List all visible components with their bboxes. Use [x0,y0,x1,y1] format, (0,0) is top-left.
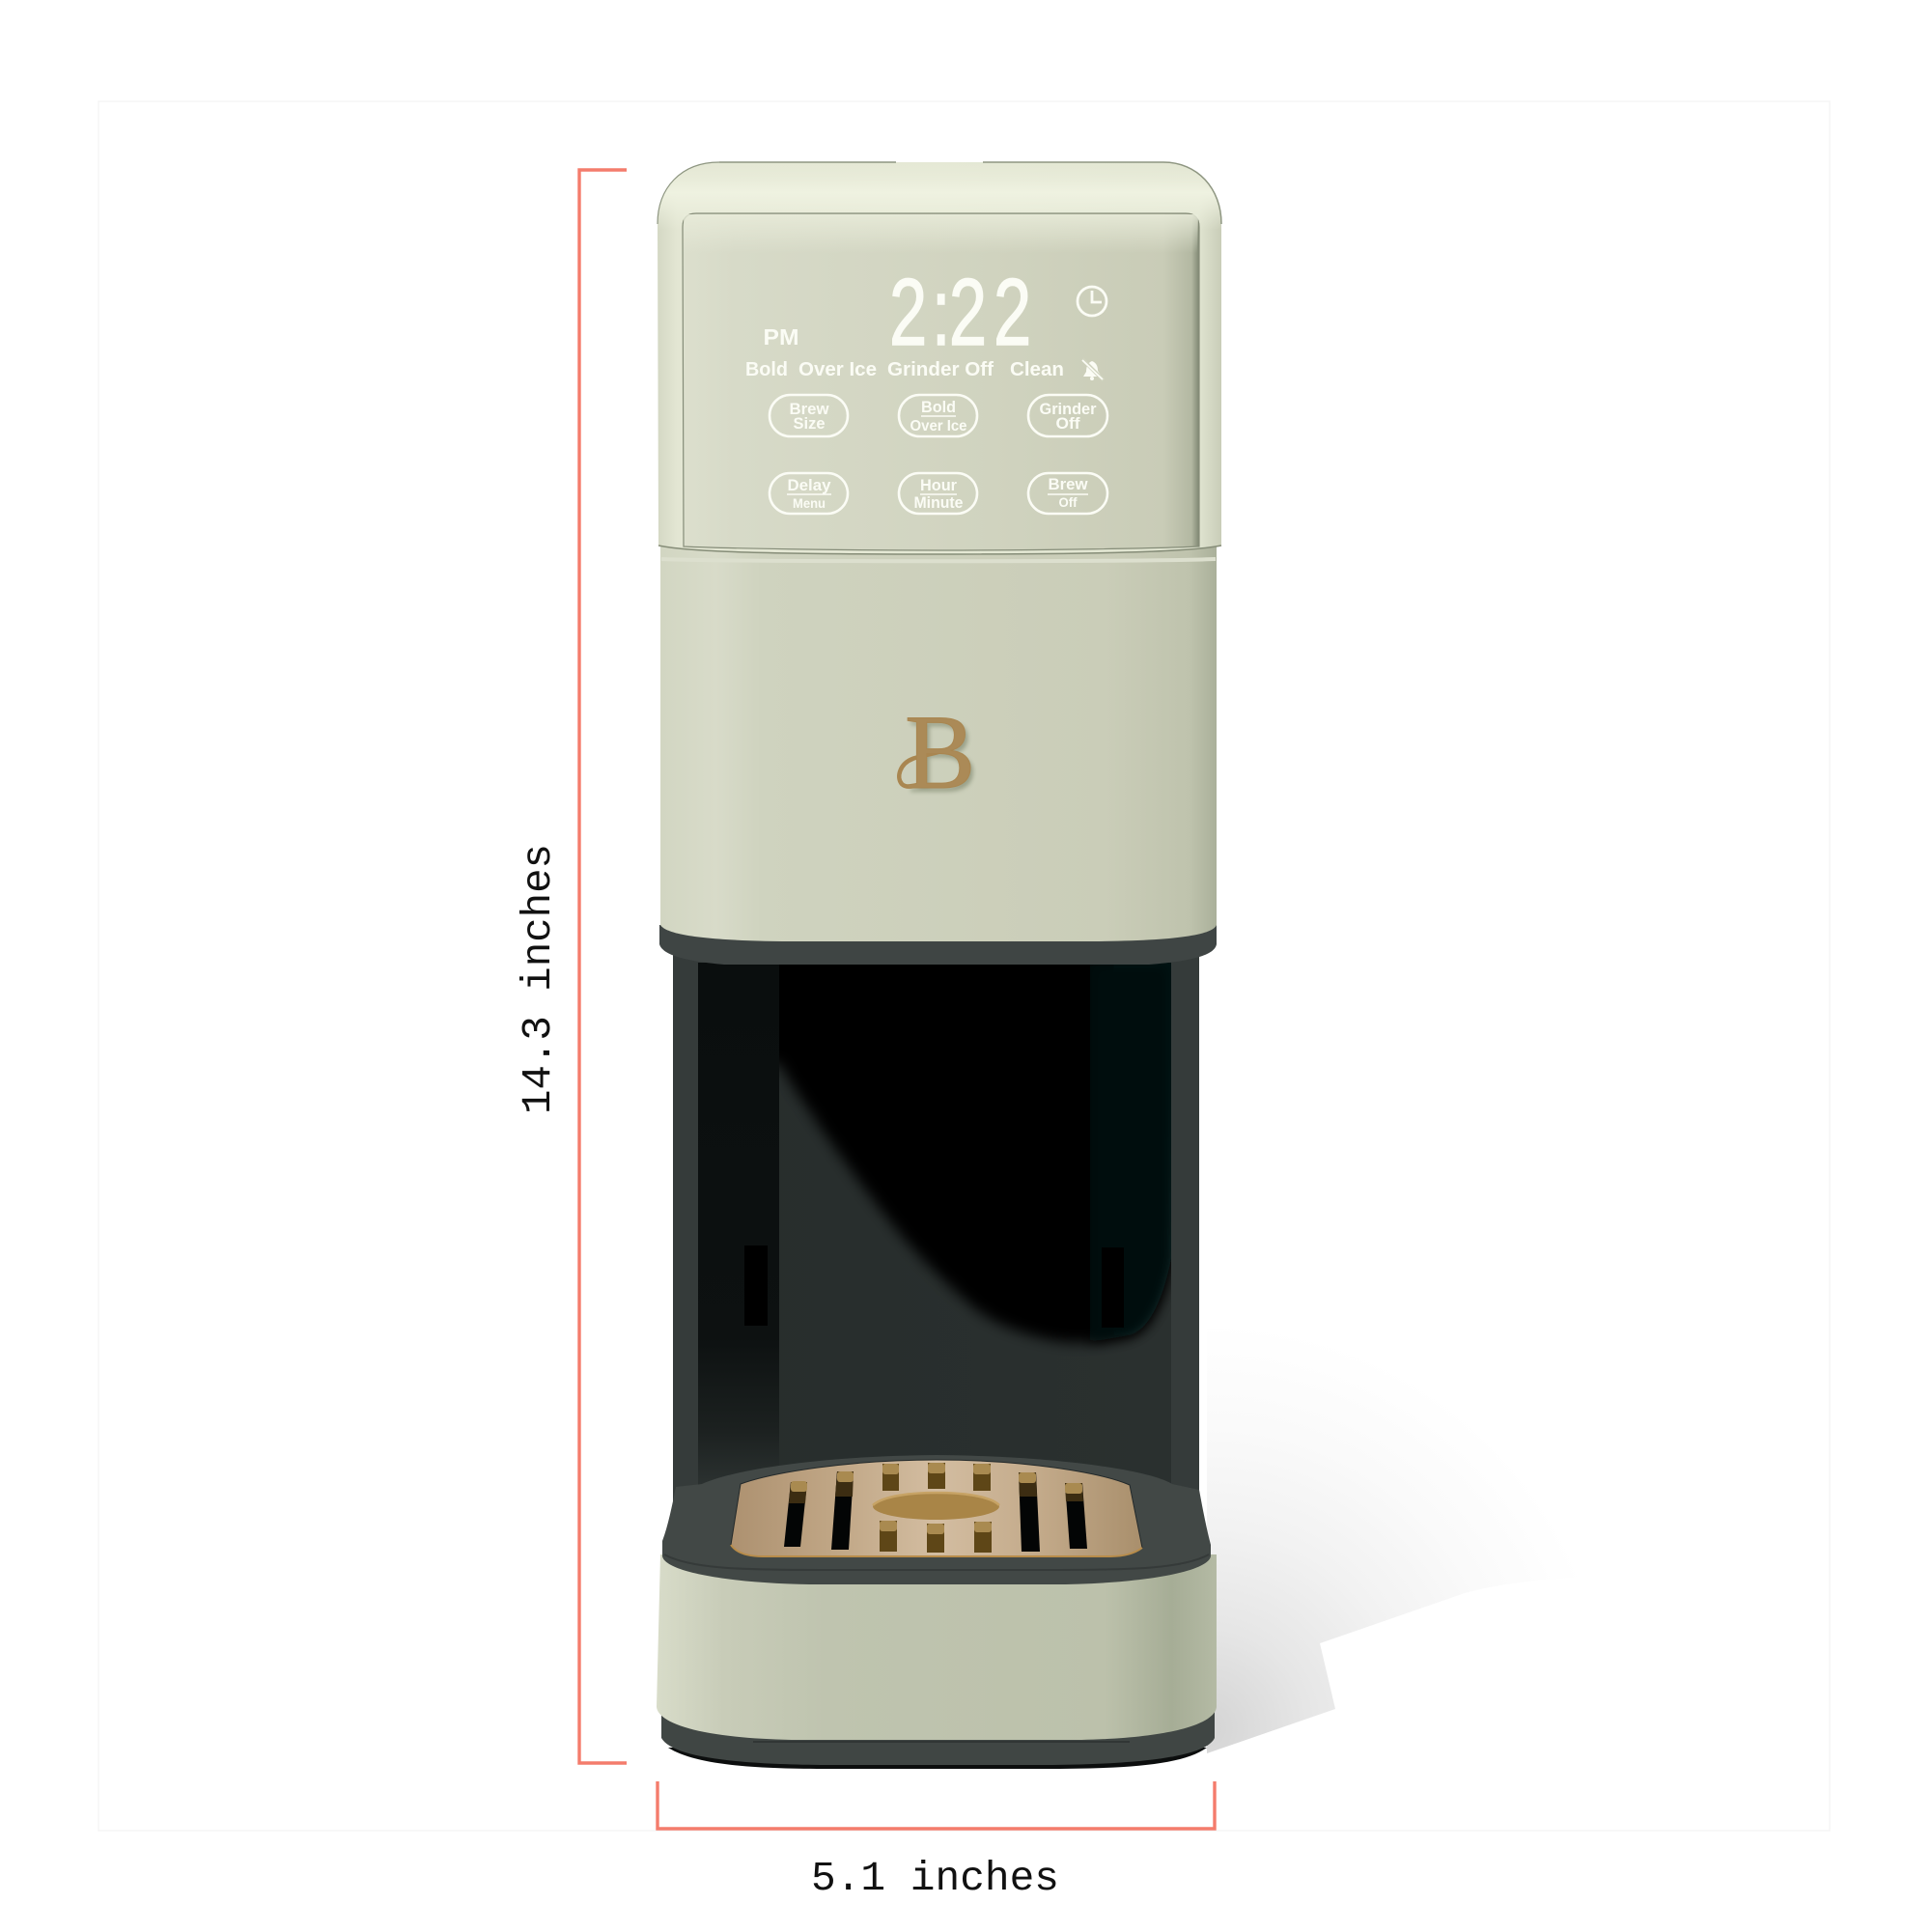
status labels: Over Ice [798,359,877,380]
buttons: Over Ice [910,418,967,434]
buttons: Minute [913,493,964,512]
buttons: Bold [921,398,956,416]
brand logo B: B [908,697,978,815]
coffee maker [657,162,1221,1769]
side slot right [1102,1247,1124,1328]
base green [657,1554,1217,1740]
middle body [660,536,1217,941]
buttons: Size [794,414,825,433]
black floor shadow [668,1748,1207,1769]
status labels: Clean [1010,359,1064,380]
dark band [659,925,1217,965]
buttons: Brew [1049,475,1088,493]
dark interior shadow [698,963,1171,1446]
status labels [745,359,1064,380]
height label: 14.3 inches [515,844,562,1114]
interior right strip [1090,963,1171,1342]
PM label: PM [763,324,799,350]
dark foot [661,1709,1215,1765]
buttons: Delay [788,476,831,494]
control panel [683,213,1199,550]
buttons: Brew [790,400,829,418]
width bracket [658,1781,1215,1829]
width label: 5.1 inches [811,1855,1059,1902]
tray deck [662,1455,1211,1584]
height bracket [579,170,627,1763]
buttons [770,395,1107,514]
status labels: Bold [745,359,788,380]
interior left strip [698,963,779,1484]
buttons: Hour [920,476,957,494]
digital clock: 2:22 [889,261,1031,366]
side slot left [744,1246,768,1326]
buttons: Menu [793,495,826,511]
clock icon [1078,287,1106,316]
buttons: Grinder [1039,400,1097,418]
head [658,162,1221,554]
buttons: Off [1056,414,1080,433]
cavity frame [673,946,1199,1521]
brand logo B: B [905,693,975,811]
buttons: Off [1058,494,1078,510]
status labels: Grinder Off [887,359,994,380]
cup rest [873,1493,999,1520]
slots [784,1463,1087,1553]
icon: muted bell [1082,359,1104,380]
cast shadow [1207,1463,1439,1753]
gold tray [731,1460,1142,1556]
